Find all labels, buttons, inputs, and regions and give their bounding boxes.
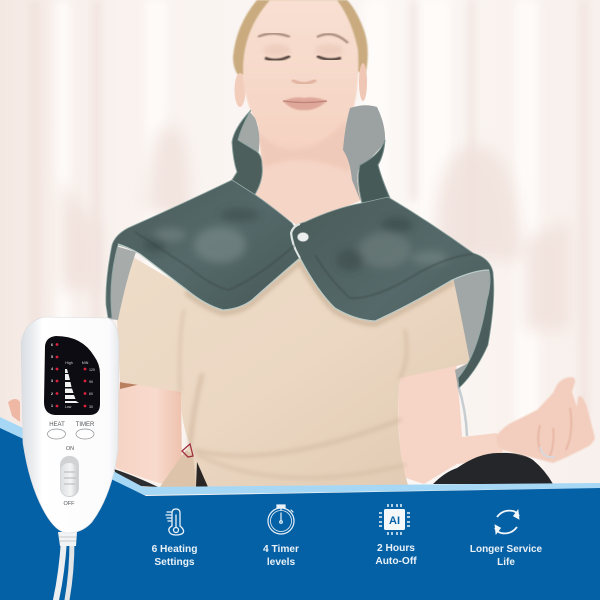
feature: 2 hours auto-off: Auto-Off [375,556,417,567]
remote cable [56,532,77,600]
woman [8,0,595,487]
display captions: Low [65,405,72,409]
wrap quilted ridge lines [135,232,473,298]
heat and timer buttons [48,422,95,439]
heat level labels [51,342,54,408]
arms [8,362,503,484]
face and neck [234,0,367,226]
snap button [298,232,308,242]
heat level labels: 5 [51,354,54,359]
blue banner [0,417,600,600]
heat and timer buttons: TIMER [76,422,95,428]
heat wedge [65,369,79,403]
on/off slider: OFF [64,501,75,507]
power cord [458,385,467,436]
display captions [65,361,95,409]
display captions: MIN [82,361,89,365]
feature: 6 heating settings: 6 Heating [152,544,197,555]
display captions: 90 [89,380,93,384]
wrap plush mottling [143,208,448,271]
wrap collar [232,110,390,203]
shirt folds [180,262,452,478]
feature: longer service life [470,510,543,568]
icon: refresh arrows [495,510,519,534]
feature: 4 timer levels [263,505,299,568]
remote body [21,317,119,533]
heat level labels: 4 [51,366,54,371]
on/off slider [60,446,79,507]
banner blue panel [0,428,600,600]
shirt knot [160,444,208,487]
heat level LEDs [56,343,86,407]
ring [540,447,555,457]
feature: longer service life: Life [497,557,515,568]
remote controller [21,317,119,533]
banner light stripe [0,417,600,495]
icon: thermometer [166,509,184,535]
feature: longer service life: Longer Service [470,544,543,555]
wrap seam piping [118,224,489,321]
display captions: High [65,361,73,365]
feature: 4 timer levels: 4 Timer [263,544,299,555]
feature: 6 heating settings [152,509,197,568]
display captions: 120 [89,368,95,372]
wrap inner grey lining [107,105,492,388]
feature: 2 hours auto-off [375,504,417,567]
heat and timer buttons: HEAT [49,422,65,428]
feature: 2 hours auto-off: 2 Hours [377,543,415,554]
wrap left wing [106,180,300,318]
heat level labels: 3 [51,378,54,383]
feature: 6 heating settings: Settings [154,557,195,568]
right hand [497,377,595,463]
black trousers [114,453,553,487]
on/off slider: ON [66,446,74,452]
remote display [44,336,100,415]
icon: stopwatch [268,505,294,534]
display captions: 30 [89,405,93,409]
wrap right wing [292,197,494,388]
icon: AI chip: AI [389,515,400,527]
heat level labels: 6 [51,342,54,347]
display captions: 60 [89,392,93,396]
hair [233,0,368,75]
heat level labels: 2 [51,391,54,396]
heat level labels: 1 [51,403,54,408]
shirt [117,257,470,487]
heated neck and shoulder wrap [106,105,494,388]
feature: 4 timer levels: levels [267,557,295,568]
